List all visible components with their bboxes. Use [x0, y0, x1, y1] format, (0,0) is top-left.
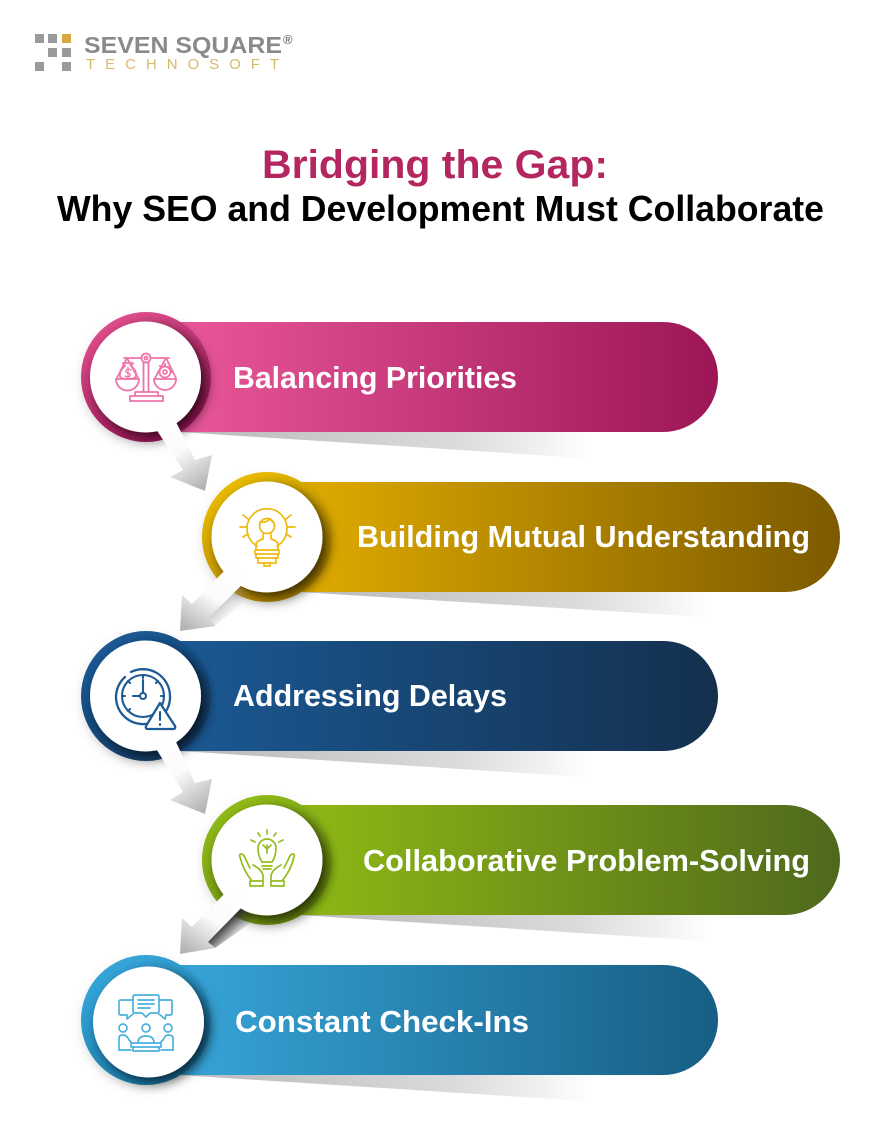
circle ring [202, 472, 332, 602]
step 1: Balancing Priorities [81, 312, 718, 491]
bar [267, 482, 840, 592]
bar [146, 641, 718, 751]
step 2: Building Mutual Understanding [180, 472, 840, 631]
icon: hands holding light bulb [240, 830, 294, 886]
step 5: Constant Check-Ins [81, 955, 718, 1102]
white circle [212, 804, 322, 916]
step label: Collaborative Problem-Solving [363, 844, 810, 878]
logo tagline: TECHNOSOFT [86, 56, 279, 73]
bar [146, 965, 718, 1075]
logo [35, 32, 293, 73]
step label: Constant Check-Ins [235, 1005, 529, 1039]
step label: Balancing Priorities [233, 361, 517, 395]
circle ring [81, 312, 211, 442]
step 4: Collaborative Problem-Solving [180, 795, 840, 954]
icon: balance scale [116, 354, 176, 401]
step label: Addressing Delays [233, 679, 507, 713]
icon: team meeting [119, 995, 173, 1051]
arrow to step 5 [180, 886, 249, 954]
bar shadow [300, 915, 770, 942]
arrow to step 3 [180, 563, 249, 631]
logo wordmark: SEVEN SQUARE [84, 32, 282, 58]
arrow dark shade [208, 908, 258, 948]
arrow to step 2 [150, 410, 212, 491]
title line 1: Bridging the Gap: [262, 143, 608, 187]
circle ring [81, 955, 211, 1085]
icon: clock with warning [116, 669, 175, 729]
circle ring [81, 631, 211, 761]
bar shadow [180, 751, 650, 778]
white circle [90, 640, 201, 752]
white circle [93, 966, 204, 1078]
bar [146, 322, 718, 432]
white circle [90, 322, 201, 432]
icon: person in light bulb [240, 509, 295, 566]
bar shadow [180, 432, 650, 459]
title line 2: Why SEO and Development Must Collaborate [57, 188, 824, 229]
step label: Building Mutual Understanding [357, 520, 810, 554]
arrow to step 4 [150, 729, 212, 814]
bar [267, 805, 840, 915]
title [57, 143, 824, 229]
bar shadow [300, 592, 770, 618]
bar shadow [180, 1075, 650, 1102]
circle ring [202, 795, 332, 925]
white circle [212, 482, 322, 592]
arrow shade [208, 587, 254, 625]
step 3: Addressing Delays [81, 631, 718, 814]
logo mark: squares [35, 34, 71, 71]
logo registered mark: ® [283, 32, 293, 47]
